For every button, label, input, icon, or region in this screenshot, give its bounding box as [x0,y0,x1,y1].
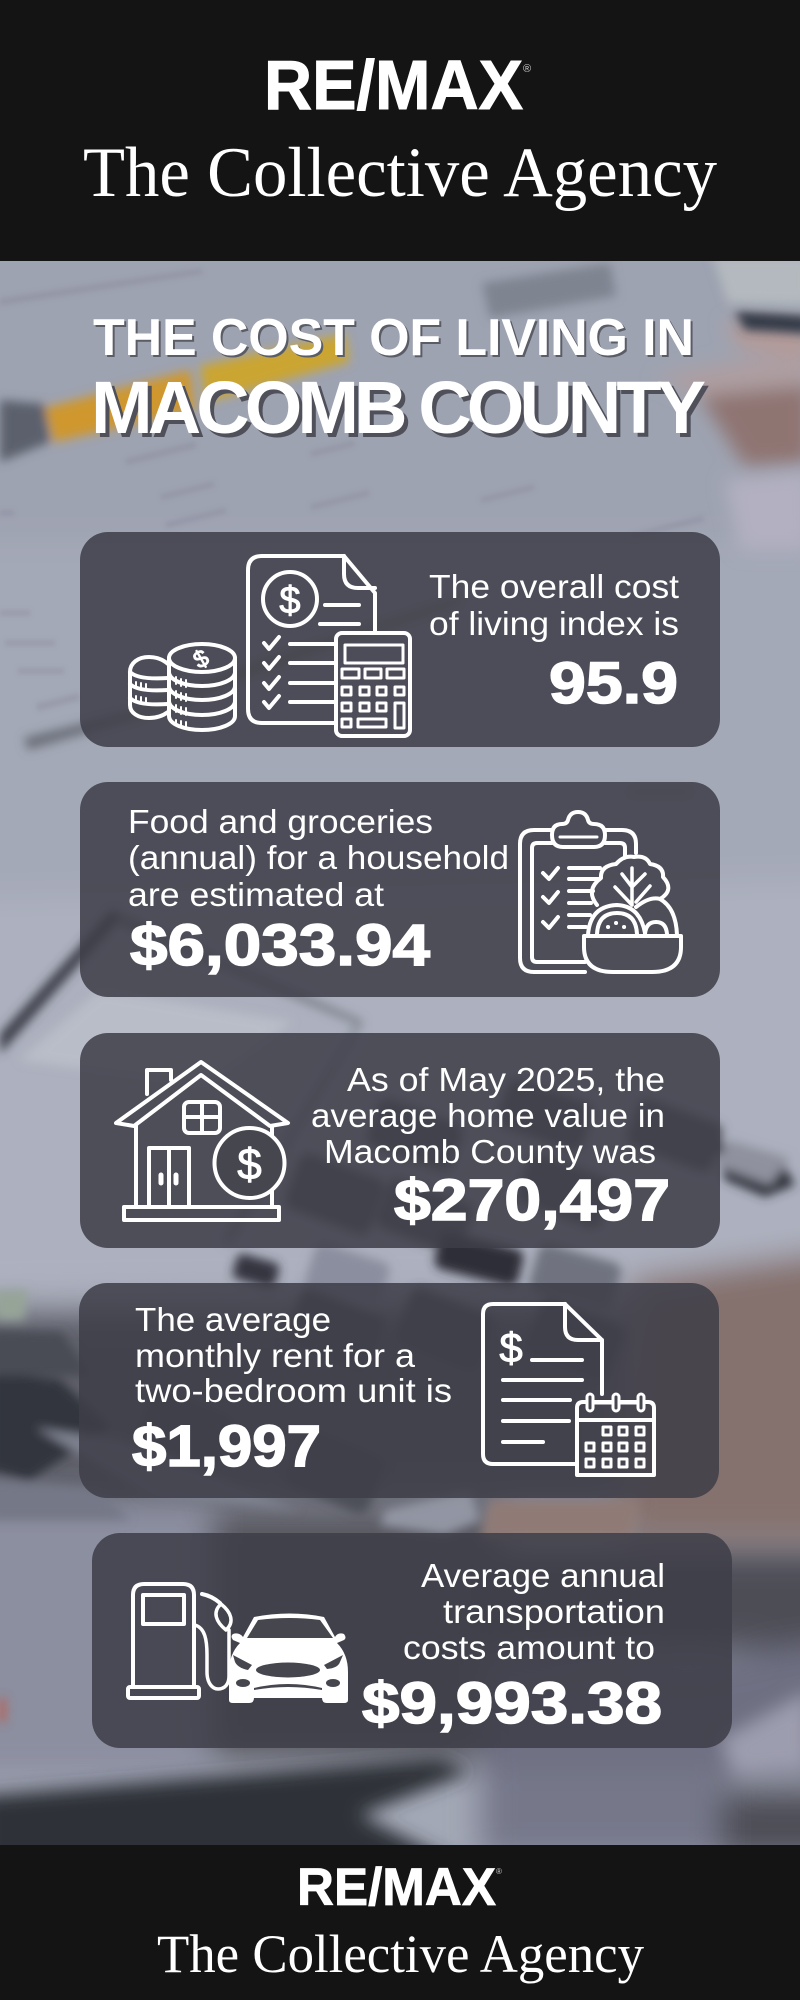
blurred table rows on the paper [0,268,705,711]
footer logo: RE/MAX: RE/MAX [297,1858,496,1917]
panel: food and groceries: are estimated at [128,876,384,913]
car grille and fog lamps [236,1662,340,1690]
panel: annual transportation costs: costs amount to [403,1629,655,1666]
icon: coins, bill and calculator: $ [279,580,301,622]
header band [0,0,800,261]
icon: rent document with calendar [483,1304,654,1475]
card text: As of May 2025, the [347,1061,665,1098]
panel: annual transportation costs: transportation [443,1593,665,1630]
car silhouette [229,1614,348,1703]
icon: coins, bill and calculator: $ [189,644,214,674]
panel: average monthly rent: two-bedroom unit is [135,1372,452,1409]
icon: grocery clipboard and salad bowl [520,812,681,972]
stat: $9,993.38: $9,993.38 [362,1671,662,1736]
icon: coins, bill and calculator [130,556,410,736]
icon: house with dollar coin: $ [237,1140,262,1189]
icon: rent document with calendar: $ [499,1324,523,1371]
card text: Food and groceries [128,803,433,840]
stat: $270,497: $270,497 [394,1168,670,1233]
stat: 95.9: 95.9 [549,651,678,716]
title line 1: THE COST OF LIVING IN [93,309,694,367]
calculator keys [283,1076,726,1256]
registered mark: ® [523,63,531,75]
panel: food and groceries: (annual) for a household [128,839,509,876]
footer agency name: The Collective Agency [157,1924,644,1984]
panel: overall cost of living index: of living index is [429,605,679,642]
paper top [712,255,800,305]
card text: The overall cost [429,568,679,605]
panel: average monthly rent [79,1283,719,1498]
icon: house with dollar coin [116,1062,288,1220]
panel: average home value [80,1033,720,1248]
card text: The average [135,1301,331,1338]
card text: Average annual [421,1557,665,1594]
stat: $1,997: $1,997 [132,1414,321,1479]
panel: annual transportation costs [92,1533,732,1748]
logo: RE/MAX: RE/MAX [264,46,523,124]
hand on the paper [655,345,800,398]
footer registered mark: ® [496,1867,502,1876]
title line 2: MACOMB COUNTY [91,366,706,449]
bottom dark bar [0,1758,470,1870]
panel: food and groceries [80,782,720,997]
agency name: The Collective Agency [83,134,717,212]
panel: average home value: Macomb County was [324,1133,656,1170]
panel: average monthly rent: monthly rent for a [135,1337,416,1374]
main title [91,309,706,449]
icon: fuel pump and car [128,1584,348,1703]
panel: overall cost of living index [80,532,720,747]
panel: average home value: average home value in [311,1097,665,1134]
footer band [0,1845,800,2000]
calculator edges [0,910,122,1054]
stat: $6,033.94: $6,033.94 [130,913,430,978]
